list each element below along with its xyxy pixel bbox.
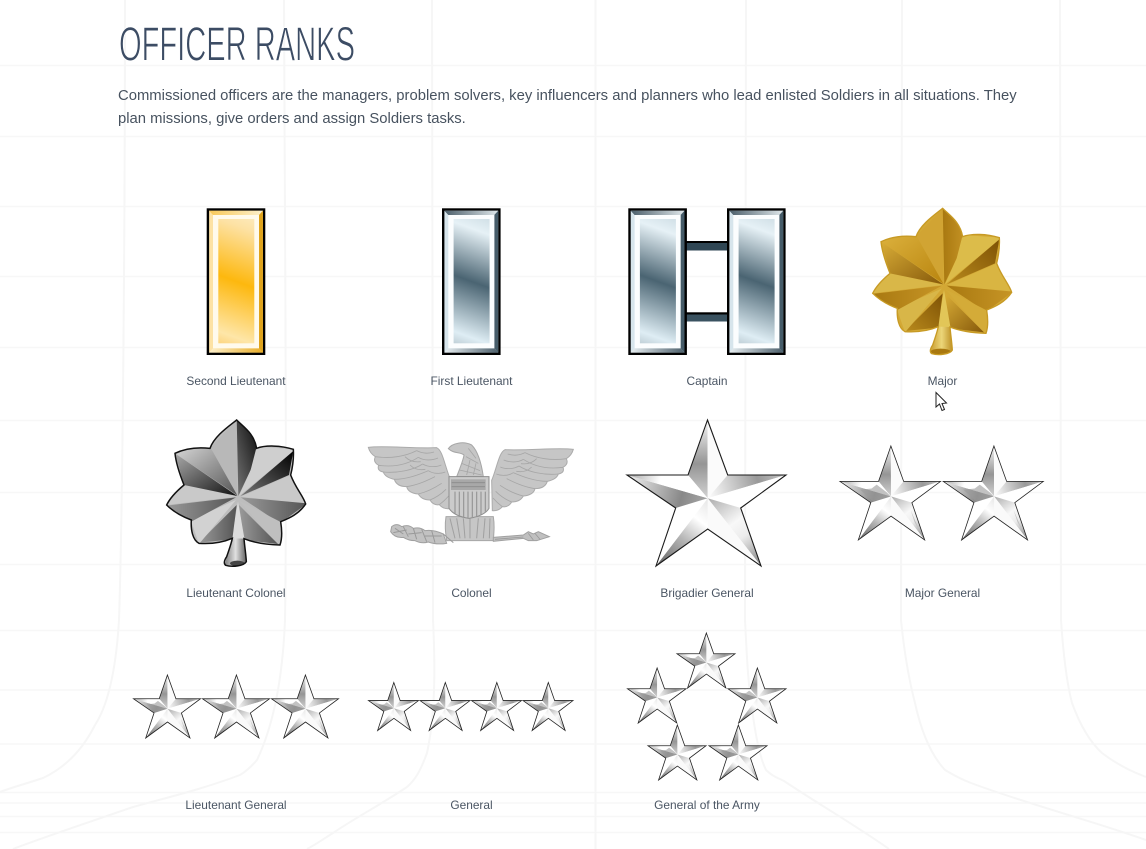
rank: General: General (450, 798, 493, 812)
rank: Captain: Captain (686, 374, 728, 388)
rank: Lieutenant Colonel (164, 417, 311, 600)
rank: First Lieutenant: First Lieutenant (431, 374, 513, 388)
rank: General of the Army: General of the Army (654, 798, 760, 812)
rank: Colonel: Colonel (451, 586, 492, 600)
rank: Lieutenant General (134, 675, 338, 812)
icon: mouse cursor (936, 392, 946, 410)
intro paragraph: plan missions, give orders and assign Soldiers tasks. (118, 111, 466, 127)
rank: Major General (840, 446, 1043, 600)
title: OFFICER RANKS (119, 18, 355, 72)
rank: Second Lieutenant: Second Lieutenant (186, 374, 286, 388)
rank: Second Lieutenant (186, 208, 286, 388)
rank: Lieutenant General: Lieutenant General (185, 798, 287, 812)
rank: Lieutenant Colonel: Lieutenant Colonel (186, 586, 286, 600)
rank: Major (870, 205, 1017, 388)
rank: General (368, 682, 573, 812)
rank: Brigadier General (627, 420, 786, 600)
rank: General of the Army (628, 633, 786, 812)
rank: First Lieutenant (431, 208, 513, 388)
rank: Colonel (368, 443, 573, 600)
intro paragraph: Commissioned officers are the managers, problem solvers, key influencers and planners who lead enlisted Soldiers in all situations. They (118, 88, 1017, 104)
rank: Major General: Major General (905, 586, 980, 600)
rank: Major: Major (928, 374, 957, 388)
intro paragraph (118, 88, 1017, 127)
rank: Brigadier General: Brigadier General (660, 586, 754, 600)
rank: Captain (628, 208, 786, 388)
